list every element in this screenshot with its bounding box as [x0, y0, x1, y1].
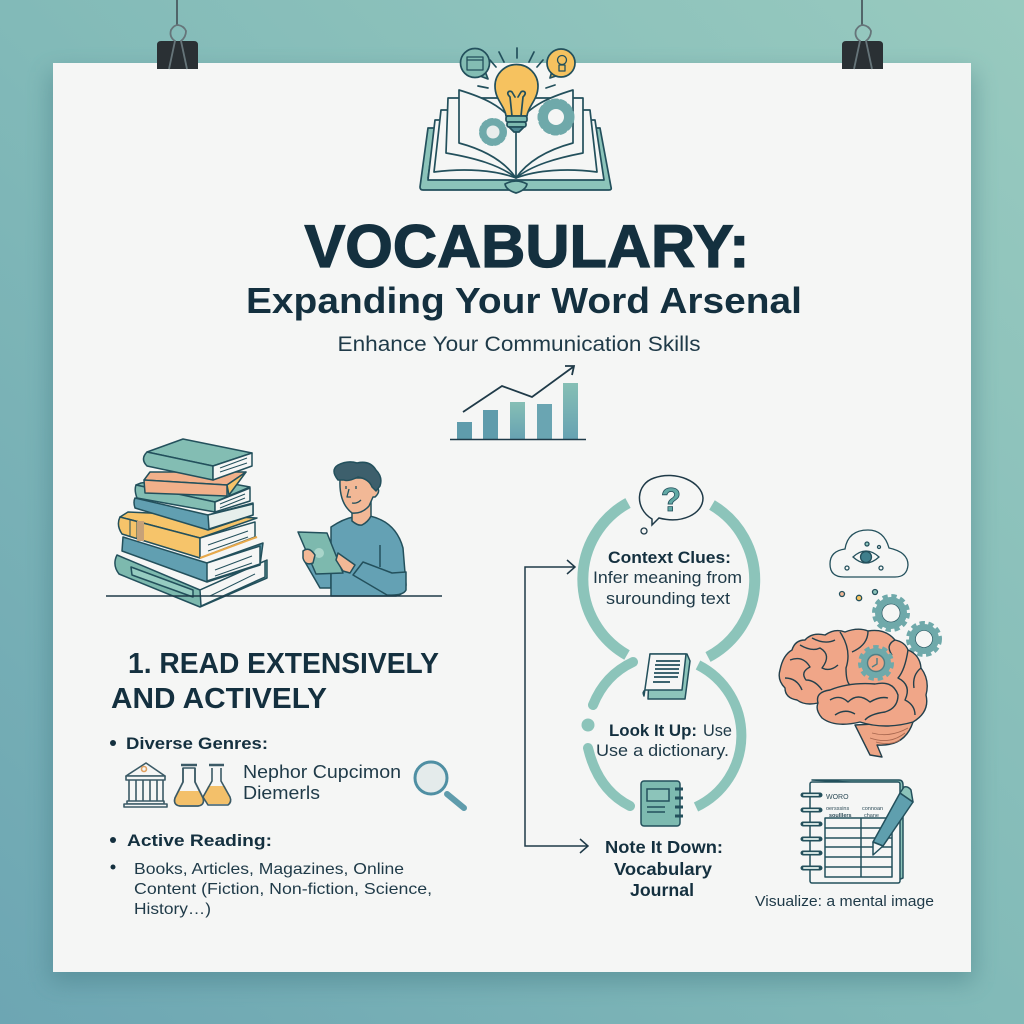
sleeve seam [379, 545, 381, 567]
binder clip: left [157, 0, 198, 69]
list: active reading [110, 831, 432, 918]
icon: teal notebook [641, 781, 683, 826]
book 6 [122, 537, 263, 582]
notebook labels: soulllers [829, 813, 852, 819]
ring: context clues [583, 503, 755, 657]
bar chart with rising arrow [450, 366, 586, 440]
icon: word notebook with pen [803, 780, 913, 883]
book 1 [144, 439, 252, 480]
icon: question bubble [639, 475, 703, 534]
list: active reading: Books, Articles, Magazines, Online [134, 861, 404, 878]
word table [825, 818, 892, 877]
list: active reading: Content (Fiction, Non-fiction, Science, [134, 881, 432, 898]
hair [334, 462, 381, 491]
icon: document book [643, 654, 690, 699]
title [246, 213, 802, 321]
heading: read extensively [111, 648, 439, 715]
book 5 [118, 512, 257, 558]
text: look it up: Use a dictionary. [596, 741, 729, 760]
tagline: Enhance Your Communication Skills [338, 333, 700, 356]
title: VOCABULARY: [304, 213, 750, 280]
list: diverse genres: Diverse Genres: [126, 734, 268, 753]
list: diverse genres: Nephor Cupcimon [243, 762, 401, 782]
list: diverse genres [110, 734, 401, 803]
neck and face [340, 478, 379, 525]
face details [346, 486, 361, 503]
text: context clues: Infer meaning from [593, 568, 742, 587]
illustration: person reading tablet [298, 462, 406, 596]
rays [478, 48, 555, 88]
icon: question bubble: ? [661, 481, 681, 518]
book 7 [115, 555, 267, 607]
text: look it up: Use [703, 721, 732, 740]
speech bubble: teal [460, 48, 490, 79]
illustration: brain [779, 629, 927, 757]
text: look it up [596, 721, 732, 760]
arm behind tablet [305, 560, 331, 588]
ground line [106, 595, 442, 597]
icon: gears [875, 597, 939, 654]
heading: read extensively: AND ACTIVELY [111, 683, 327, 715]
book 2 [144, 472, 246, 496]
list: active reading: History…) [134, 901, 211, 918]
text: note it down: Vocabulary [614, 859, 712, 879]
notebook labels: oersssins [826, 806, 849, 812]
list: active reading: Active Reading: [127, 831, 272, 850]
text: context clues: surounding text [606, 589, 730, 608]
text: note it down: Note It Down: [605, 837, 723, 857]
gear small [481, 120, 505, 144]
ring: look it up [582, 662, 741, 807]
notebook labels: connoan [862, 806, 883, 812]
icon: magnifying glass [415, 762, 464, 808]
text: note it down [605, 837, 723, 900]
pen [873, 787, 913, 855]
caption: visualize: Visualize: a mental image [755, 893, 934, 910]
gear large [540, 101, 572, 133]
text: context clues [593, 548, 742, 608]
embedded gear [861, 648, 891, 678]
text: note it down: Journal [630, 880, 694, 900]
notebook labels: WORO [826, 794, 849, 801]
notebook labels [826, 794, 883, 819]
cerebrum folds [785, 631, 921, 720]
speech bubble: orange [547, 49, 575, 78]
light bulb [495, 64, 538, 132]
sleeve [353, 562, 406, 595]
icon: cloud with eye [830, 530, 908, 601]
icon: museum [124, 763, 167, 807]
tablet [298, 532, 343, 574]
heading: read extensively: 1. READ EXTENSIVELY [128, 648, 439, 680]
text: context clues: Context Clues: [608, 548, 731, 567]
notebook labels: chane [864, 813, 879, 819]
torso [331, 516, 406, 596]
hands [303, 549, 355, 573]
cerebrum [779, 629, 927, 726]
illustration: stack of books [115, 439, 267, 607]
icon: flasks [175, 765, 231, 806]
subtitle: Expanding Your Word Arsenal [246, 280, 802, 321]
book 3 [135, 476, 250, 512]
connector arrows [525, 560, 588, 853]
list: diverse genres: Diemerls [243, 783, 320, 803]
book 4 [134, 498, 253, 530]
cerebellum and stem [855, 722, 913, 757]
text: look it up: Look It Up: [609, 721, 697, 740]
binder clip: right [842, 0, 883, 69]
icon: open book with light bulb [420, 48, 611, 193]
